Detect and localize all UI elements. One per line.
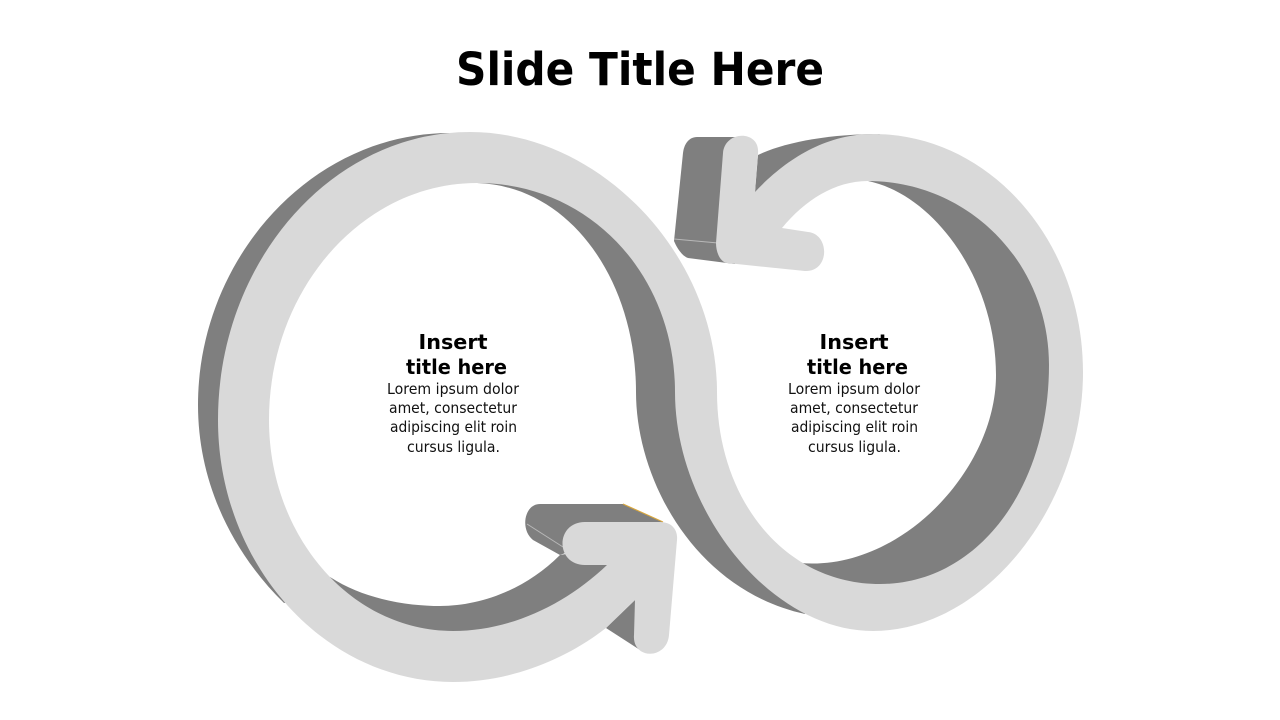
text block: right loop: Lorem ipsum dolor [788,380,921,398]
title: Slide Title Here [456,43,824,96]
text block: right loop: adipiscing elit roin [791,418,918,436]
text block: left loop: cursus ligula. [407,438,500,456]
text block: right loop: cursus ligula. [808,438,901,456]
text block: left loop: adipiscing elit roin [390,418,517,436]
ribbon with two arrowheads [218,132,1083,682]
diagram: 3D looping arrows [198,132,1083,682]
edge highlights [527,239,718,547]
text block: left loop: Lorem ipsum dolor [387,380,520,398]
depth shading of the ribbon [198,133,1065,655]
text block: left loop: amet, consectetur [389,399,518,417]
text block: left loop: title here [406,355,507,379]
text block: right loop: title here [807,355,908,379]
text block: left loop [387,330,520,456]
text block: right loop [788,330,921,456]
text block: right loop: amet, consectetur [790,399,919,417]
text block: right loop: Insert [820,330,889,354]
text block: left loop: Insert [418,330,488,354]
